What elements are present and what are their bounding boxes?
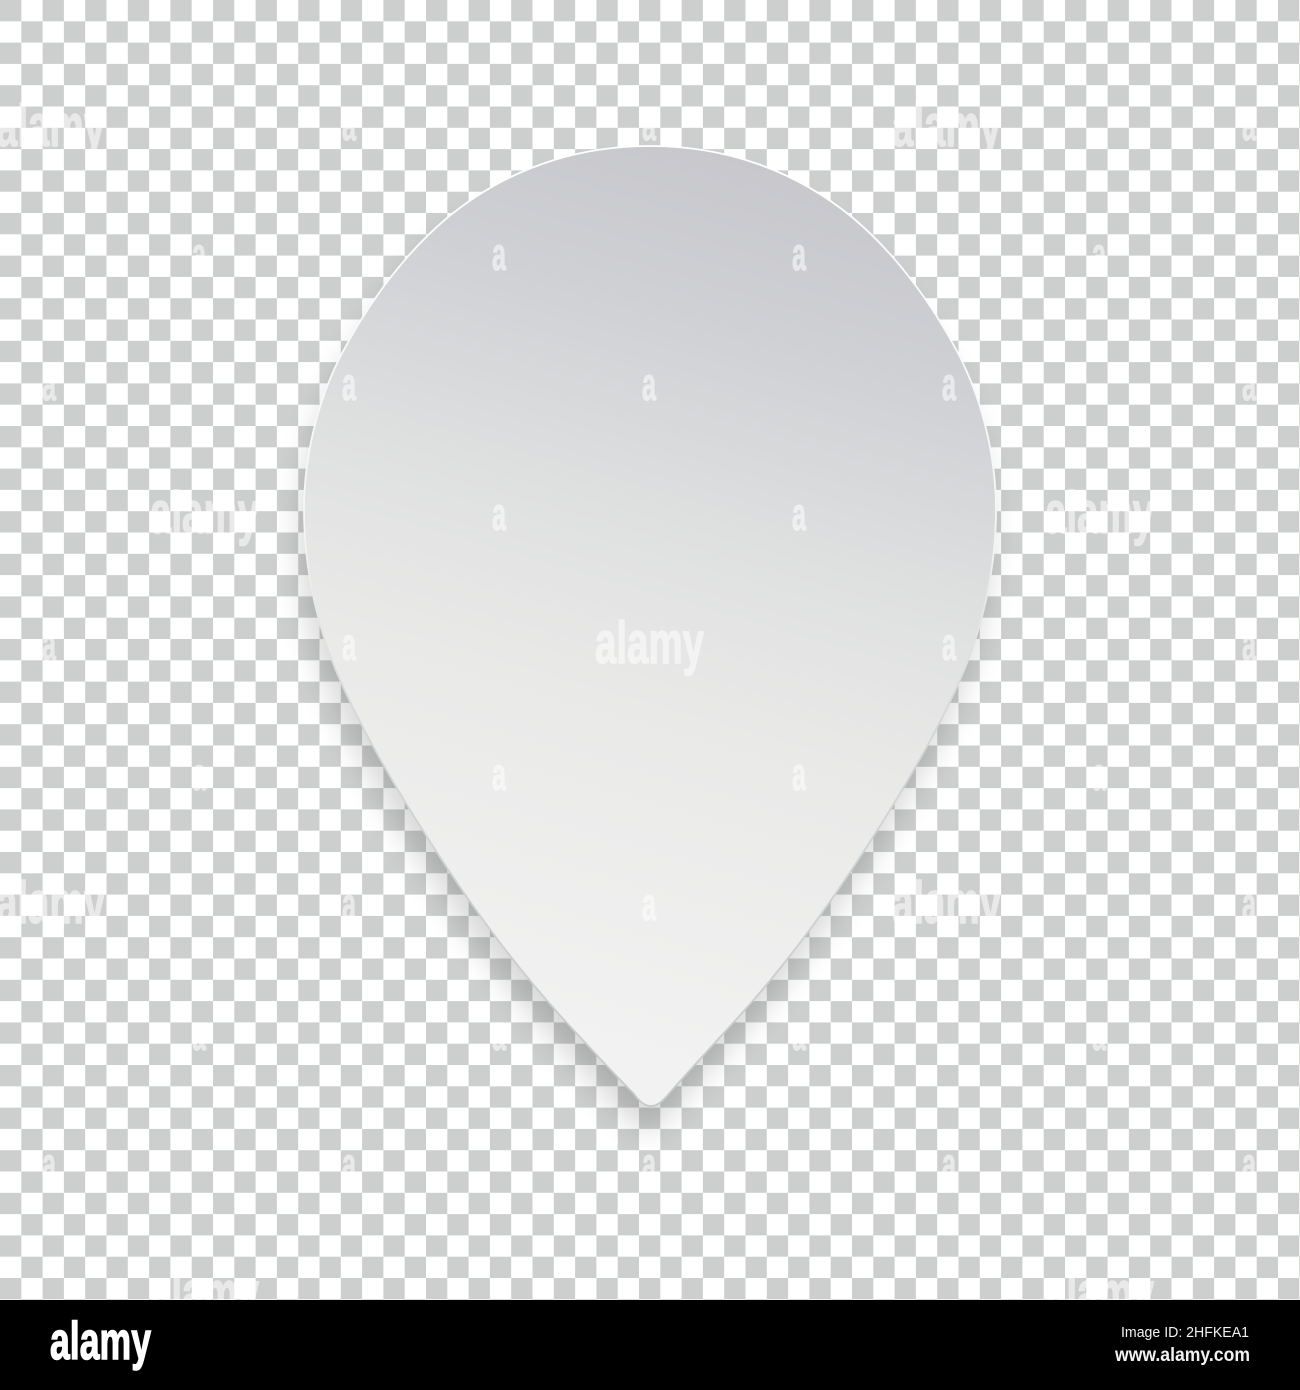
watermark logo: top left: alamy — [0, 93, 105, 159]
small watermark letters: a — [342, 1138, 356, 1190]
small watermark letters: a — [642, 358, 656, 410]
small watermark letters: a — [1092, 1008, 1106, 1060]
small watermark letters: a — [642, 1138, 656, 1190]
small watermark letters: a — [42, 1138, 56, 1190]
small watermark letters: a — [1242, 358, 1256, 410]
footer bar — [0, 1300, 1300, 1390]
small watermark letters: a — [492, 228, 506, 280]
small watermark letters: a — [192, 228, 206, 280]
watermark logo: middle right: alamy — [1045, 480, 1154, 546]
small watermark letters: a — [342, 358, 356, 410]
watermark logo: top right: alamy — [892, 93, 1001, 159]
small watermark letters: a — [1242, 98, 1256, 150]
watermark logo: lower right: alamy — [892, 870, 1001, 936]
footer logo: alamy — [50, 1312, 151, 1371]
small watermark letters: a — [342, 98, 356, 150]
small watermark letters: a — [942, 358, 956, 410]
small watermark letters: a — [1242, 618, 1256, 670]
small watermark letters: a — [492, 748, 506, 800]
image id: Image ID: 2HFKEA1 — [1121, 1324, 1249, 1341]
small watermark letters: a — [942, 1138, 956, 1190]
small watermark letters: a — [42, 358, 56, 410]
small watermark letters: a — [342, 878, 356, 930]
small watermark letters: a — [42, 618, 56, 670]
small watermark letters: a — [492, 1008, 506, 1060]
watermark logo: centre: alamy — [595, 610, 704, 676]
small watermark letters: a — [792, 488, 806, 540]
small watermark letters: a — [1092, 228, 1106, 280]
small watermark letters: a — [342, 618, 356, 670]
small watermark letters — [42, 98, 1256, 1190]
small watermark letters: a — [642, 878, 656, 930]
small watermark letters: a — [792, 748, 806, 800]
website address: www.alamy.com — [1114, 1345, 1250, 1366]
watermark logo: bottom right: alamy — [1045, 1260, 1154, 1326]
small watermark letters: a — [792, 1008, 806, 1060]
small watermark letters: a — [492, 488, 506, 540]
small watermark letters: a — [942, 618, 956, 670]
pin drop shadow — [299, 172, 991, 1132]
watermark logo: middle left: alamy — [150, 480, 259, 546]
small watermark letters: a — [642, 98, 656, 150]
map pin shape — [304, 146, 996, 1106]
small watermark letters: a — [1092, 748, 1106, 800]
small watermark letters: a — [192, 1008, 206, 1060]
small watermark letters: a — [1242, 1138, 1256, 1190]
watermark logo: lower left: alamy — [0, 870, 105, 936]
watermark logo: bottom left: alamy — [150, 1260, 259, 1326]
small watermark letters: a — [1242, 878, 1256, 930]
small watermark letters: a — [192, 748, 206, 800]
small watermark letters: a — [792, 228, 806, 280]
